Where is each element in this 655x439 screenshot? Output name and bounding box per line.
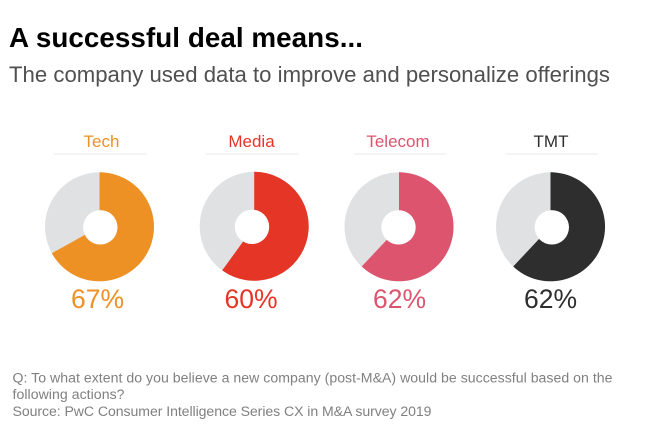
- Telecom label: Telecom: [366, 132, 430, 151]
- Tech label: Tech: [84, 132, 119, 151]
- TMT donut chart: [496, 172, 605, 281]
- Media label: Media: [228, 132, 275, 151]
- Media underline: [206, 154, 298, 155]
- panel: TMT: [496, 132, 605, 314]
- Telecom underline: [354, 154, 446, 155]
- panel: Media: [200, 132, 309, 314]
- Telecom value: 62%: [373, 284, 426, 314]
- Tech donut chart: [45, 172, 154, 281]
- footnote: following actions?: [12, 386, 125, 402]
- TMT label: TMT: [534, 132, 568, 151]
- title: A successful deal means...: [9, 22, 363, 53]
- Tech value: 67%: [71, 284, 124, 314]
- subtitle: The company used data to improve and personalize offerings: [9, 62, 610, 87]
- panel: Telecom: [344, 132, 454, 314]
- footnote: Q: To what extent do you believe a new company (post-M&A) would be successful based on the: [12, 370, 613, 386]
- panel: Tech: [45, 132, 154, 314]
- Tech underline: [54, 154, 146, 155]
- TMT underline: [506, 154, 598, 155]
- footnote: [12, 370, 613, 419]
- footnote: Source: PwC Consumer Intelligence Series CX in M&A survey 2019: [12, 403, 432, 419]
- Media value: 60%: [224, 284, 278, 314]
- Media donut chart: [200, 172, 309, 281]
- TMT value: 62%: [524, 284, 577, 314]
- Telecom donut chart: [344, 172, 454, 281]
